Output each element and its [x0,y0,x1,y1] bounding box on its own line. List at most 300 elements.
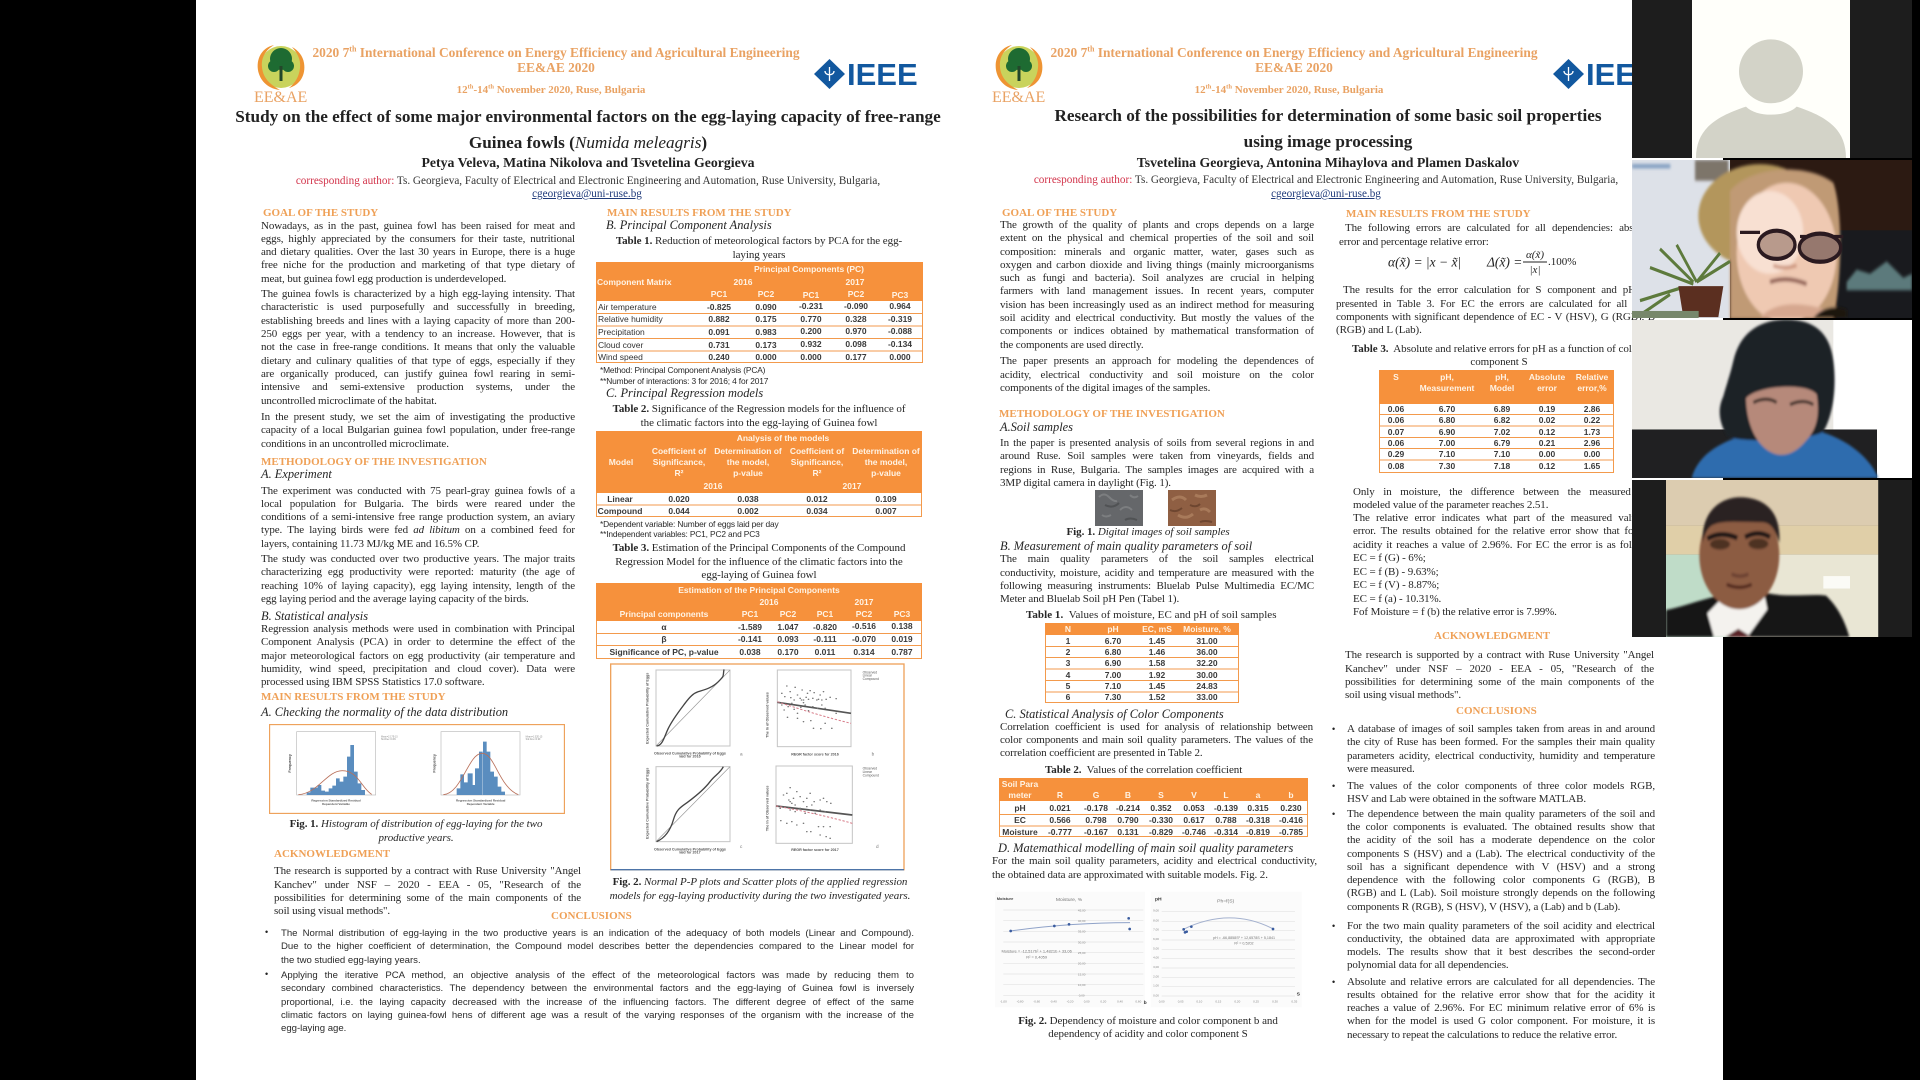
black line above video tile 3 [1723,318,1912,320]
text: relative error list: acidity it reaches a value of 2.96%. For EC the error is as follows: [1353,539,1655,551]
table 2: regression models: Significance, [653,457,705,467]
black margin right of poster [1723,637,1920,1080]
table 1: PCA: 0.000 [800,352,822,362]
table: correlation coefficient: -0.314 [1214,827,1238,837]
table 1: PCA: 0.932 [800,339,822,349]
text: goal poster 2 part 1 [1000,219,1314,351]
table: correlation coefficient: -0.746 [1182,827,1206,837]
figure: histograms [269,724,565,814]
conference heading [312,44,800,74]
table: absolute and relative errors: Model [1490,383,1514,393]
table: correlation coefficient: -0.330 [1149,815,1173,825]
text: conclusion approximation [1347,920,1655,973]
table: absolute and relative errors: 0.29 [1388,449,1405,459]
text: experiment 1: local population for Bulgaria. The birds were reared under the [261,498,575,510]
figure: P-P and scatter plots: Expected Cumulative Probability of Eggs [645,673,649,744]
table: correlation coefficient: a [1256,790,1261,800]
table: correlation coefficient: -0.416 [1279,815,1303,825]
heading: goal poster 2: GOAL OF THE STUDY [1002,206,1117,218]
table: soil sample values: 7.10 [1105,681,1122,691]
text: conclusion database: were measured. [1347,763,1415,775]
subheading: experiment: A. Experiment [261,467,332,481]
text: goal 1: meat, but guinea fowl egg production is underdeveloped. [261,273,506,285]
caption: errors table line 2: component S [1470,356,1528,368]
poster 1 title: Guinea fowls (Numida meleagris) [469,132,707,152]
table: soil sample values [1045,623,1239,702]
text: conclusion 2: Applying the iterative PCA method, an objective analysis of the effect of the meteorological factors was made by reducing them to [281,970,914,981]
table 1: PCA: 0.200 [800,326,822,336]
bullet: • [1332,724,1335,734]
chart: moisture vs colour component b: -0,20 [1067,1000,1074,1004]
table 3: principal components: -0.141 [738,634,762,644]
text: conclusion colour models [1347,780,1655,807]
table: correlation coefficient [999,778,1308,837]
chart: moisture vs colour component b: R² = 0,4059 [1026,954,1048,959]
text: conclusion dependence [1347,808,1655,914]
table: soil sample values: 24.83 [1196,681,1218,691]
chart: moisture vs colour component b: 20,00 [1078,962,1086,966]
table 3: principal components [596,583,922,658]
caption: table 1: Table 1. Reduction of meteorological factors by PCA for the egg- [616,235,902,247]
table: soil sample values: 1.46 [1149,647,1166,657]
table 1: PCA: 0.175 [755,314,777,324]
heading: acknowledgment poster 2: ACKNOWLEDGMENT [1434,630,1550,642]
conference date right: 12th-14th November 2020, Ruse, Bulgaria [1195,83,1383,96]
chart: moisture vs colour component b: 25,00 [1078,951,1086,955]
chart: acidity vs colour component S: 5,00 [1153,946,1159,950]
table 1: PCA: PC1 [711,289,728,299]
figure: P-P and scatter plots: c [740,844,743,849]
table: absolute and relative errors: 1.65 [1584,461,1601,471]
table 3: principal components: 0.011 [815,647,836,657]
table: correlation coefficient: -0.178 [1084,803,1108,813]
table 2 notes [600,519,780,539]
chart: acidity vs colour component S: Ph=f(S) [1217,899,1235,905]
table: correlation coefficient: -0.139 [1214,803,1238,813]
poster 2 authors: Tsvetelina Georgieva, Antonina Mihaylova and Plamen Daskalov [1137,155,1519,170]
table: absolute and relative errors [1379,370,1614,472]
table 3: principal components: α [661,622,667,632]
table: absolute and relative errors: error [1537,383,1558,393]
text: goal 1: and dietary qualities. Over the last 30 years in Europe, there is a huge [261,246,575,258]
text: conclusion dependence: the acidity of the soil has a moderate dependence on the color [1347,834,1655,846]
figure: P-P and scatter plots: Linear [863,770,873,774]
table 2: regression models: Analysis of the models [737,433,830,443]
table: correlation coefficient: -0.829 [1149,827,1173,837]
table: correlation coefficient: 0.788 [1215,815,1237,825]
text: relative error list: EC = f (G) - 6%; [1353,552,1426,564]
poster 2 email: cgeorgieva@uni-ruse.bg [1271,188,1381,200]
figure: P-P and scatter plots: Compound [863,677,879,681]
table 1: PCA: PC3 [892,290,909,300]
text: acknowledgment poster 2 [1345,649,1654,703]
formula: relative error: .100% [1548,256,1576,268]
chart: acidity vs colour component S: 4,00 [1153,956,1159,960]
figure: histograms: Std.Dev.=0.99 [381,738,396,741]
chart: acidity vs colour component S: 0,25 [1253,1000,1259,1004]
table 3: principal components: 0.314 [853,647,875,657]
table: absolute and relative errors: pH, [1495,372,1509,382]
chart: acidity vs colour component S: 0,30 [1272,1000,1278,1004]
bullet: • [1332,781,1335,791]
figure: P-P and scatter plots: The ln of Observed values [765,786,769,831]
text: acknowledgment left: The research is supported by a contract with Ruse University "Angel [274,865,581,877]
table: correlation coefficient: S [1158,790,1164,800]
caption: figure 1: Fig. 1. Histogram of distribution of egg-laying for the two [290,818,542,830]
table: absolute and relative errors: 0.00 [1584,449,1601,459]
figure: P-P and scatter plots [611,664,904,870]
text: conclusion dependence: The dependence between the main quality parameters of the soil and [1347,808,1655,820]
figure: histograms: Dependent Variable [467,802,495,806]
table 1: PCA: 0.731 [708,340,730,350]
text: conclusion 2 [281,970,914,1034]
table: soil sample values: 6 [1066,692,1071,702]
text: soil samples: regions in Ruse, Bulgaria. The samples images are acquired with a [1000,464,1314,476]
table: soil sample values: 1.92 [1149,670,1166,680]
caption: soil images: Fig. 1. Digital images of soil samples [1066,526,1230,538]
caption: soil figure 2: dependency of acidity and color component S [1048,1028,1248,1040]
table: soil sample values: 2 [1066,647,1071,657]
heading: methodology poster 2: METHODOLOGY OF THE INVESTIGATION [999,408,1225,420]
table: absolute and relative errors: 7.00 [1439,438,1456,448]
figure: P-P and scatter plots: a [740,751,743,756]
subheading: statistical analysis: B. Statistical analysis [261,609,368,623]
text: relative error list [1353,512,1655,620]
formula: absolute error: α(x̃) = |x − x̃| [1388,254,1461,270]
table 3: principal components: -0.070 [852,634,876,644]
text: acknowledgment left: Kanchev" under NSF – 2020 - EEA - 05, "Research of the [274,879,581,891]
text: modelling [992,855,1317,881]
text: relative error list: EC = f (V) - 8.87%; [1353,579,1439,591]
table 1 notes: **Number of interactions: 3 for 2016; 4 for 2017 [600,376,769,386]
chart: acidity vs colour component S: 0,05 [1178,1000,1184,1004]
text: measurement: The main quality parameters of the soil samples electrical [1000,553,1314,565]
text: results for error calculation: (RGB) and L (Lab). [1336,324,1422,336]
table 2: regression models: 0.038 [737,494,759,504]
caption: table 3: egg-laying of Guinea fowl [701,569,817,581]
text: moisture difference: Only in moisture, the difference between the measured and [1353,486,1655,498]
text: goal 3: In the present study, we set the aim of investigating the productive [261,411,575,423]
table: absolute and relative errors: 0.02 [1539,415,1556,425]
table 3: principal components: 2017 [855,597,874,607]
figure: P-P and scatter plots: d [876,844,879,849]
table: absolute and relative errors: pH, [1440,372,1454,382]
table 2: regression models: Significance, [791,457,843,467]
chart: acidity vs colour component S: 3,00 [1153,965,1159,969]
text: relative error list: EC = f (a) - 10.31%. [1353,593,1441,605]
text: experiment 2 [261,553,576,605]
IEEE text: IEEE [847,57,918,92]
formula: relative error: |x| [1530,264,1540,276]
text: conclusion dependence: (RGB) and L (Lab). Soil moisture strongly depends on the following [1347,887,1655,899]
table 2: regression models: the model, [727,457,769,467]
video tile: woman with glasses [1632,160,1912,318]
conference heading right [1050,44,1538,74]
caption: soil figure 2 [1018,1014,1278,1040]
figure: histograms: Frequency [288,753,292,773]
formula: relative error: α(x̃) [1526,249,1544,261]
table: correlation coefficient: 0.617 [1183,815,1205,825]
table: soil sample values: 30.00 [1196,670,1218,680]
table 1: PCA: 0.173 [755,340,777,350]
text: statistical analysis: humidity, wind speed, precipitation and cloud cover). Data were [261,663,575,675]
text: conclusion approximation: models. The results show that it best describes the second-order [1347,946,1655,958]
text: statistical analysis: processed using IBM SPSS Statistics 17.0 software. [261,676,485,688]
figure: histograms: Mean=2.17E-15 [381,736,398,738]
text: conclusion colour models: HSV and Lab were obtained in the software MATLAB. [1347,793,1586,805]
table: absolute and relative errors: 6.70 [1439,404,1456,414]
table 1: PCA: 0.000 [755,352,777,362]
table 1: PCA: -0.231 [799,301,823,311]
chart: acidity vs colour component S: 8,00 [1153,918,1159,922]
text: conclusion 2: proportional, i.e. the laying capacity decreased with the increase of the influencing factors. The different degree of effect of the same [281,997,914,1008]
icon: EE&AE logo left [258,45,304,90]
table 1: PCA: Air temperature [598,302,657,312]
table: soil sample values: 3 [1066,658,1071,668]
table 2: regression models: Model [609,457,633,467]
text: relative error list: The relative error indicates what part of the measured value is [1353,512,1655,524]
chart: acidity vs colour component S: R² = 0,5202 [1234,941,1254,945]
table 1: PCA: 0.090 [755,302,777,312]
text: results for error calculation: presented in Table 3. For EC the errors are calculated for all color [1336,298,1655,310]
text: acknowledgment poster 2: Kanchev" under NSF – 2020 - EEA - 05, "Research of the [1345,663,1654,675]
video tile: woman in blue [1632,320,1912,478]
table 1: PCA: Component Matrix [597,277,672,287]
text: conclusion errors: results obtained for the relative error show that for the acidity it [1347,989,1655,1001]
text: conclusion 1: the two studied egg-laying years. [281,955,421,966]
text: goal 2: 250 eggs per year, with a tendency to an increase. However, that is [261,328,575,340]
text: goal 2: dietary and culinary qualities of that type of eggs, especially if they [261,355,575,367]
table 2: regression models: 2017 [843,481,862,491]
heading: main results middle: MAIN RESULTS FROM THE STUDY [607,206,792,218]
table: correlation coefficient: -0.167 [1084,827,1108,837]
table: soil sample values: pH [1107,624,1119,634]
table 1: PCA: 2016 [734,277,753,287]
text: experiment 2: The study was conducted over two productive years. The major traits [261,553,575,565]
table: absolute and relative errors: 7.30 [1439,461,1456,471]
poster 1 authors: Petya Veleva, Matina Nikolova and Tsvetelina Georgieva [421,155,755,170]
table: absolute and relative errors: Measurement [1420,383,1475,393]
table: correlation coefficient: L [1223,790,1229,800]
table: soil sample values: Moisture, % [1183,624,1231,634]
text: acknowledgment left: possibilities for determining some of the main components of the [274,892,581,904]
table 1: PCA: 0.882 [708,314,730,324]
table 1: PCA: Principal Components (PC) [754,264,864,274]
table: absolute and relative errors: 0.00 [1539,449,1556,459]
table 2: regression models: R² [813,468,822,478]
table: absolute and relative errors: 1.73 [1584,427,1601,437]
text: relative error list: Fof Moisture = f (b) the relative error is 7.99%. [1353,606,1557,618]
text: experiment 2: characterizing egg productivity were reported: maturity (the age of [261,566,575,578]
text: goal 3 [261,411,575,450]
table 3: principal components: β [661,634,667,644]
chart: acidity vs colour component S: 0,00 [1153,994,1159,998]
chart: moisture vs colour component b: Moisture [997,896,1014,901]
poster background [196,0,1723,1080]
chart: moisture vs colour component b: -1,00 [1000,1000,1007,1004]
black line above video tile 4 [1723,478,1912,480]
table 2: regression models: 0.109 [875,494,897,504]
text: errors intro: error and percentage relative error: [1339,236,1489,248]
figure: P-P and scatter plots: Observed Cumulative Probability of Eggs [654,751,726,755]
figure: P-P and scatter plots: Observed [863,670,877,674]
table: absolute and relative errors: 0.12 [1539,427,1556,437]
table: soil sample values: 6.80 [1105,647,1122,657]
figure: P-P and scatter plots: laid for 2016 [679,755,701,759]
caption: table 2 [612,403,906,428]
heading: acknowledgment left: ACKNOWLEDGMENT [274,848,390,860]
table 3: principal components: 0.787 [891,647,913,657]
table: correlation coefficient: Soil Para [1002,779,1038,789]
table 3: principal components: Principal components [620,609,709,619]
table: correlation coefficient: 0.352 [1150,803,1172,813]
table: correlation coefficient: 0.131 [1117,827,1139,837]
caption: table 2: the climatic factors into the egg-laying of Guinea fowl [641,416,877,428]
poster 2 title: using image processing [1244,132,1412,151]
heading: conclusions poster 2: CONCLUSIONS [1456,704,1537,716]
table: correlation coefficient: -0.819 [1246,827,1270,837]
caption: table 3: Regression Model for the influence of the climatic factors into the [615,556,903,568]
text: conclusion 1: Due to the higher coefficient of determination, the Compound model describes better the dependencies compared to the Linear model for [281,941,914,952]
table 2 notes: *Dependent variable: Number of eggs laid per day [600,519,780,529]
text: moisture difference: modeled value of the parameter reaches 2.51. [1353,499,1548,511]
caption: figure 1 [290,818,542,844]
conference heading right: EE&AE 2020 [1255,60,1333,74]
text: goal 3: conditions in an uncontrolled microclimate. [261,438,449,450]
heading: goal: GOAL OF THE STUDY [263,206,378,218]
table: correlation coefficient: b [1288,790,1294,800]
text: goal poster 2 part 1: soil acidity and electrical conductivity. But mostly the values of the [1000,312,1314,324]
table 1: PCA: 0.240 [708,352,730,362]
subheading: measurement: B. Measurement of main quality parameters of soil [1000,539,1252,553]
figure: P-P and scatter plots: Compound [863,773,879,777]
table: correlation coefficient: R [1057,790,1063,800]
table 1: PCA: -0.134 [888,339,912,349]
text: experiment 2: reaching 10% of laying capacity), egg laying intensity, length of the [261,580,575,592]
table: absolute and relative errors: 0.22 [1584,415,1601,425]
chart: moisture vs colour component b: 0,00 [1084,1000,1090,1004]
text: conclusion errors: reaches a value of 2.96%. For EC minimum relative error of 6% is [1347,1002,1655,1014]
table: absolute and relative errors: 2.86 [1584,404,1601,414]
table 2: regression models: Linear [607,494,633,504]
video tile: man in suit [1632,480,1912,637]
chart: moisture vs colour component b [995,892,1147,1007]
conference heading right: 2020 7th International Conference on Energy Efficiency and Agricultural Engineering [1050,44,1538,60]
table: soil sample values: 5 [1066,681,1071,691]
figure: histograms: Mean=1.52E-15 [526,736,543,738]
poster 1 title: Study on the effect of some major environmental factors on the egg-laying capacity of free-range [235,106,941,126]
logo text right: EE&AE [992,89,1045,106]
icon: IEEE logo [814,59,845,89]
text: errors intro [1339,222,1655,248]
text: conclusion database: A database of images of soil samples taken from areas in and around [1347,723,1655,735]
table 2: regression models: 0.007 [875,506,897,516]
table: soil sample values: 1.45 [1149,681,1166,691]
chart: moisture vs colour component b: 0,20 [1100,1000,1107,1004]
table 3: principal components: -0.516 [852,621,876,631]
text: conclusion dependence: soil has a significant dependence with V (HSV) and a strong [1347,861,1655,873]
text: statistical analysis: Regression analysis methods were used in combination with Principal [261,623,575,635]
table: absolute and relative errors: 7.02 [1494,427,1511,437]
icon: EE&AE logo right [996,45,1042,90]
IEEE text right: IEEE [1586,57,1657,92]
figure: histograms: Regression Standardized Residual [311,799,361,803]
caption: soil table 2: Table 2. Values of the correlation coefficient [1045,764,1242,776]
text: conclusion database: the city of Ruse has been formed. For the samples their main quality [1347,736,1655,748]
figure: histograms: Regression Standardized Residual [456,799,505,803]
text: conclusion dependence: dependence with the following color components G (RGB), B [1347,874,1655,886]
text: experiment 1: layers, containing 11.73 MJ/kg ME and 16.5% CP. [261,538,479,550]
figure: P-P and scatter plots: Observed [863,767,877,771]
table: soil sample values: 1 [1066,636,1071,646]
table 1: PCA: -0.090 [844,301,868,311]
table: absolute and relative errors: 7.10 [1494,449,1511,459]
table 1: PCA: 0.177 [845,352,867,362]
text: goal 3: capacity of a local Bulgarian guinea fowl population, under free-range [261,424,575,436]
chart: acidity vs colour component S: 7,00 [1153,928,1159,932]
table 2: regression models [596,431,922,516]
caption: soil figure 2: Fig. 2. Dependency of moisture and color component b and [1018,1014,1278,1026]
table: absolute and relative errors: 7.10 [1439,449,1456,459]
table: absolute and relative errors: 0.06 [1388,415,1405,425]
text: colour analysis: Correlation coefficient is used for analysis of relationship between [1000,720,1313,732]
table 3: principal components: PC3 [894,609,911,619]
chart: acidity vs colour component S: 0,35 [1291,1000,1298,1004]
table 1: PCA: 0.770 [800,314,822,324]
table: correlation coefficient: 0.230 [1280,803,1302,813]
table 1: PCA: Precipitation [598,327,645,337]
table 2: regression models: p-value [733,468,763,478]
chart: acidity vs colour component S: 0,20 [1234,1000,1241,1004]
table 1: PCA: 0.328 [845,314,867,324]
bullet: • [1332,920,1335,930]
table: soil sample values: EC, mS [1142,624,1172,634]
table: correlation coefficient: 0.798 [1085,815,1107,825]
table: soil sample values: 1.58 [1149,658,1166,668]
table: correlation coefficient: V [1191,790,1197,800]
subheading: regression: C. Principal Regression models [606,386,763,400]
table 1: PCA: 0.964 [889,301,911,311]
text: measurement: conductivity, moisture, acidity and temperature are measured with the [1000,567,1314,579]
table 3: principal components: 0.138 [891,621,913,631]
text: acknowledgment poster 2: The research is supported by a contract with Ruse University "Angel [1345,649,1654,661]
table: correlation coefficient: Moisture [1002,827,1038,837]
text: conclusion database: parameters acidity, electrical conductivity, humidity and temperature [1347,750,1655,762]
table: correlation coefficient: -0.785 [1279,827,1303,837]
table: correlation coefficient: -0.214 [1116,803,1140,813]
chart: moisture vs colour component b: -0,80 [1017,1000,1024,1004]
text: colour analysis: correlation coefficient are presented in Table 2. [1000,747,1203,759]
text: errors intro: The following errors are calculated for all dependencies: absolute [1345,222,1655,234]
text: conclusion database [1347,723,1655,776]
table 1: PCA: Wind speed [598,352,643,362]
table: absolute and relative errors: 0.19 [1539,404,1556,414]
table 3: principal components: 2016 [760,597,779,607]
figure: histograms: Frequency [432,753,436,773]
caption: table 3 [612,542,906,581]
caption: table 2: Table 2. Significance of the Regression models for the influence of [613,403,905,415]
table 3: principal components: 0.170 [777,647,799,657]
table: soil sample values: 7.00 [1105,670,1122,680]
chart: acidity vs colour component S: 9,00 [1153,908,1159,912]
chart: acidity vs colour component S: pH = -66,8858S² + 12,6578S + 5,1841 [1213,936,1275,940]
text: statistical analysis [261,623,575,688]
text: conclusion 1: The Normal distribution of egg-laying in the two productive years is an indication of the adequacy of both models (Linear and Compound). [281,928,914,939]
text: results for error calculation: components with significant dependence of EC - V (HSV), G (RGB), B [1336,311,1655,323]
table: absolute and relative errors: 0.06 [1388,438,1405,448]
text: goal 2: establishing breeds and lines with a laying capacity of more than 200- [261,315,575,327]
table: soil sample values: 7.30 [1105,692,1122,702]
